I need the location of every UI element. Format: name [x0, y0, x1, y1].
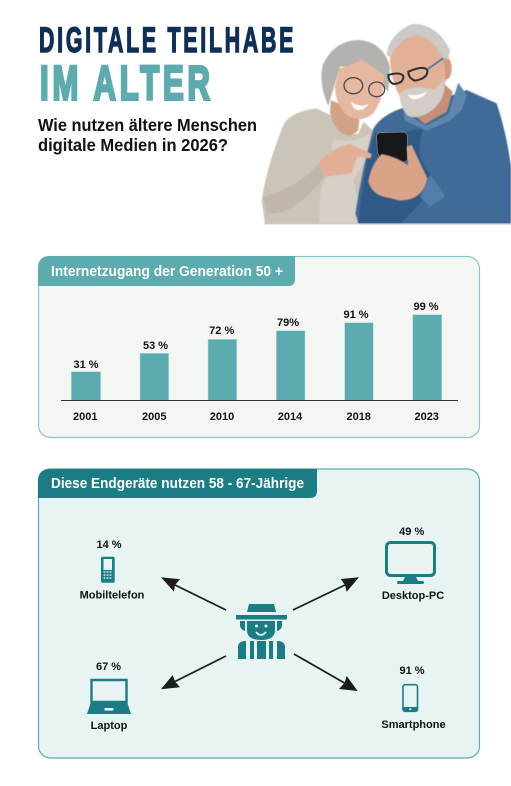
- woman's smile: [351, 102, 369, 110]
- arrow to smartphone: [294, 654, 358, 691]
- image bottom edge: [264, 223, 511, 224]
- device: mobile phone: 14 %: [96, 539, 122, 551]
- man's hair: [387, 24, 450, 60]
- bar chart: 2018: [346, 411, 371, 423]
- bar chart: 72 %: [209, 325, 234, 337]
- title line 1: DIGITALE TEILHABE: [39, 22, 296, 60]
- man's sweater: [355, 90, 511, 224]
- bar chart: 2001: [73, 411, 98, 423]
- photo: older couple looking at a smartphone: [262, 24, 511, 224]
- device: laptop: 67 %: [96, 661, 121, 673]
- device: laptop: Laptop: [91, 720, 128, 732]
- man's sweater dark area: [358, 128, 430, 224]
- bar chart: 2005: [142, 411, 167, 423]
- man's neck: [408, 83, 453, 124]
- bar chart: 99 %: [413, 301, 439, 313]
- bar chart: 2023: [414, 411, 439, 423]
- panel: devices used by 58-67 year olds: [38, 469, 480, 758]
- man's ear: [440, 57, 452, 80]
- panel heading text: Internetzugang der Generation 50 +: [51, 264, 283, 280]
- icon: desktop monitor: [386, 542, 434, 584]
- bar chart: 31 %: [73, 359, 99, 371]
- panel background: [38, 256, 480, 438]
- device: desktop PC: [382, 526, 444, 602]
- device: desktop PC: Desktop-PC: [382, 590, 444, 602]
- device: smartphone: Smartphone: [381, 719, 446, 731]
- panel heading tab: [38, 469, 317, 498]
- bar chart: [61, 301, 458, 423]
- man's sleeve cuff highlight: [420, 175, 445, 207]
- arrow to mobile phone: [161, 577, 226, 610]
- device: mobile phone: [80, 539, 145, 602]
- woman's sweater light: [319, 133, 370, 224]
- icon: laptop: [87, 680, 131, 714]
- device: desktop PC: 49 %: [399, 526, 424, 538]
- panel heading tab: [38, 256, 295, 286]
- subtitle: Wie nutzen ältere Menschen: [38, 115, 257, 135]
- subtitle: [38, 115, 257, 155]
- bar chart: 2010: [210, 411, 234, 423]
- man's face: [390, 35, 446, 115]
- man's shirt collar: [404, 83, 467, 131]
- man's glasses: [388, 58, 443, 84]
- arrow to laptop: [161, 656, 226, 689]
- panel: internet access chart: [38, 256, 480, 438]
- bar chart: 2014: [278, 411, 303, 423]
- device: smartphone: [381, 665, 446, 731]
- man's hand: [368, 145, 427, 201]
- panel background: [38, 469, 480, 758]
- device: laptop: [87, 661, 131, 732]
- bar chart: 53 %: [143, 340, 168, 352]
- bar chart: 79%: [277, 317, 299, 329]
- icon: smartphone: [403, 685, 418, 712]
- device: smartphone: 91 %: [399, 665, 425, 677]
- panel heading text: Diese Endgeräte nutzen 58 - 67-Jährige: [51, 476, 304, 492]
- subtitle: digitale Medien in 2026?: [38, 135, 228, 155]
- woman's face: [335, 59, 384, 119]
- man's beard: [399, 78, 445, 117]
- title line 2: IM ALTER: [40, 55, 214, 110]
- woman's neck: [330, 100, 360, 135]
- smartphone held by man: [377, 132, 407, 171]
- arrow to desktop: [293, 577, 359, 610]
- woman's sweater: [262, 108, 375, 224]
- woman's hand: [318, 144, 372, 177]
- woman's sleeve shading: [263, 163, 325, 214]
- woman's hair: [321, 40, 390, 106]
- man's smile: [407, 91, 427, 99]
- icon: mobile phone: [101, 557, 115, 583]
- icon: person in hat: [236, 604, 287, 659]
- woman's glasses: [344, 78, 385, 97]
- device: mobile phone: Mobiltelefon: [80, 590, 145, 602]
- bar chart: 91 %: [343, 309, 369, 321]
